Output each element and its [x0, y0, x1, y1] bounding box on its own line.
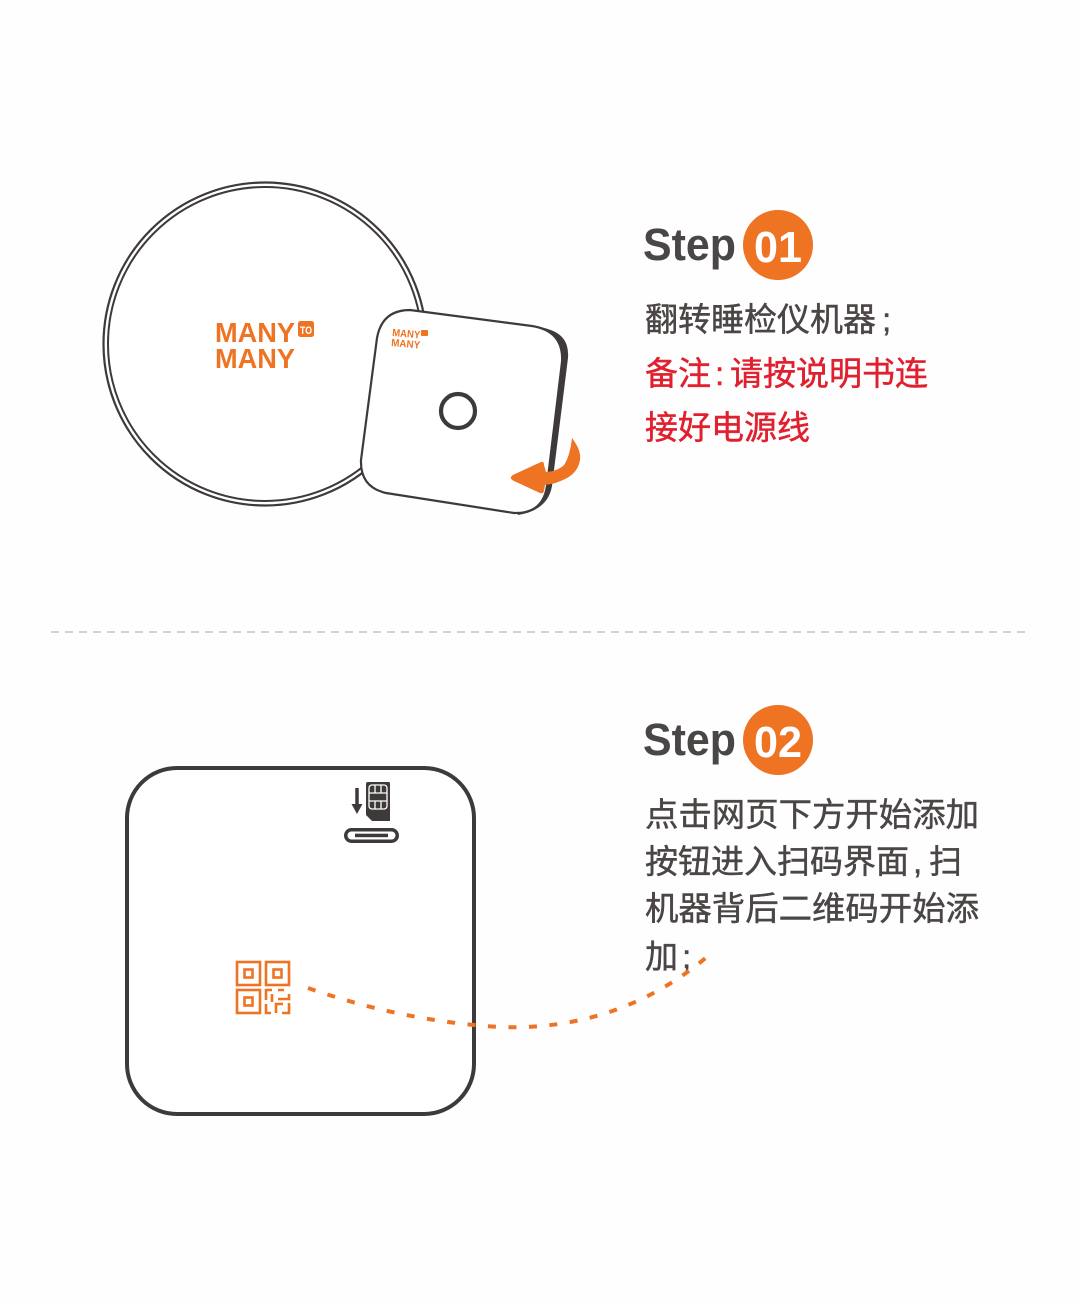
- base logo: MANY: [215, 343, 295, 374]
- text block: step 02 instructions: 加: [645, 938, 678, 975]
- text block: step 02 instructions: 机器背后二维码开始添: [645, 890, 979, 927]
- text block: step 01 instructions: 接好电源线: [645, 409, 810, 446]
- heading: step 01: Step: [643, 219, 736, 270]
- text block: step 02 instructions: ,: [913, 843, 922, 880]
- device logo: [391, 327, 428, 352]
- base logo: TO: [300, 325, 312, 337]
- text block: step 01 instructions: ;: [882, 301, 891, 338]
- text block: step 01 instructions: [645, 301, 928, 446]
- heading: step 02: [643, 705, 813, 775]
- heading: step 02: 02: [754, 718, 802, 767]
- heading: step 02: Step: [643, 714, 736, 765]
- divider: [51, 631, 1025, 633]
- illustration: sleep monitor flipped over charging disc: [104, 182, 580, 515]
- icon: sim card insertion: [346, 782, 397, 841]
- text block: step 01 instructions: 请按说明书连: [730, 355, 928, 392]
- device back outline: [127, 768, 474, 1114]
- text block: step 01 instructions: :: [715, 355, 724, 392]
- text block: step 02 instructions: ;: [682, 938, 691, 975]
- large round base: [104, 182, 426, 506]
- text block: step 01 instructions: 备注: [645, 355, 711, 392]
- base logo: MANY: [215, 317, 295, 348]
- icon: QR code: [237, 962, 289, 1013]
- heading: step 01: 01: [754, 223, 802, 272]
- device logo: MANY: [392, 327, 421, 341]
- device logo: MANY: [391, 337, 421, 352]
- text block: step 02 instructions: 按钮进入扫码界面: [645, 843, 909, 880]
- icon: curved flip arrow: [511, 438, 580, 493]
- arrow: dashed line from QR code to text: [308, 956, 708, 1027]
- text block: step 01 instructions: 翻转睡检仪机器: [645, 301, 876, 338]
- base logo: [215, 317, 314, 374]
- heading: step 01: [643, 210, 813, 280]
- text block: step 02 instructions: 扫: [929, 843, 962, 880]
- illustration: back of device: [127, 768, 474, 1114]
- device button ring: [441, 394, 475, 428]
- small square device: [361, 310, 568, 515]
- port slot: [346, 830, 397, 841]
- text block: step 02 instructions: 点击网页下方开始添加: [645, 796, 979, 833]
- text block: step 02 instructions: [645, 796, 979, 975]
